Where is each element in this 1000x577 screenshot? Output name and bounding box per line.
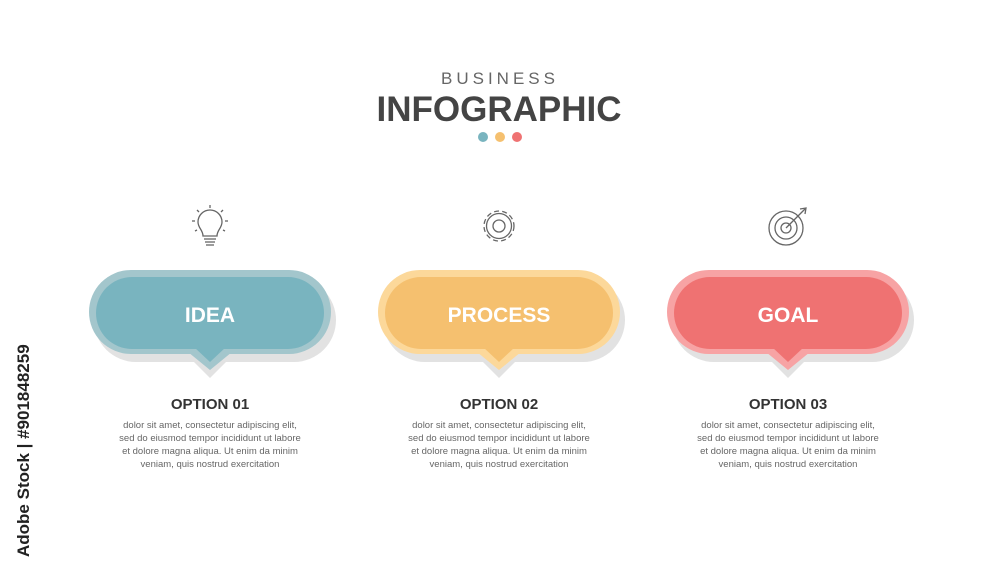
text block: option 01: veniam, quis nostrud exercitation	[141, 459, 279, 470]
text block: option 02: dolor sit amet, consectetur adipiscing elit,	[412, 420, 586, 431]
panel: process	[378, 270, 625, 378]
text block: option 01: OPTION 01	[171, 396, 249, 413]
text block: option 02: et dolore magna aliqua. Ut enim da minim	[411, 446, 587, 457]
panel: idea: IDEA	[185, 304, 235, 327]
text block: option 01: dolor sit amet, consectetur adipiscing elit,	[123, 420, 297, 431]
text block: option 02: sed do eiusmod tempor incididunt ut labore	[408, 433, 590, 444]
icon: gear	[484, 211, 514, 241]
text block: option 03: veniam, quis nostrud exercitation	[719, 459, 857, 470]
text block: option 01	[119, 396, 301, 470]
text block: option 03: dolor sit amet, consectetur adipiscing elit,	[701, 420, 875, 431]
text block: option 02: OPTION 02	[460, 396, 538, 413]
title: INFOGRAPHIC	[376, 90, 622, 129]
panel: goal	[667, 270, 914, 378]
icon: target	[769, 208, 806, 245]
text block: option 02	[408, 396, 590, 470]
panel: process: PROCESS	[448, 304, 550, 327]
title: BUSINESS	[441, 69, 559, 88]
panel: idea	[89, 270, 336, 378]
text block: option 03: et dolore magna aliqua. Ut enim da minim	[700, 446, 876, 457]
title	[376, 69, 622, 142]
panel: goal: GOAL	[758, 304, 818, 327]
text block: option 03: OPTION 03	[749, 396, 827, 413]
text block: option 03: sed do eiusmod tempor incididunt ut labore	[697, 433, 879, 444]
text block: option 01: et dolore magna aliqua. Ut enim da minim	[122, 446, 298, 457]
icon: lightbulb	[192, 205, 228, 245]
text block: option 03	[697, 396, 879, 470]
text block: option 02: veniam, quis nostrud exercitation	[430, 459, 568, 470]
watermark id: Adobe Stock | #901848259	[14, 344, 33, 557]
text block: option 01: sed do eiusmod tempor incididunt ut labore	[119, 433, 301, 444]
